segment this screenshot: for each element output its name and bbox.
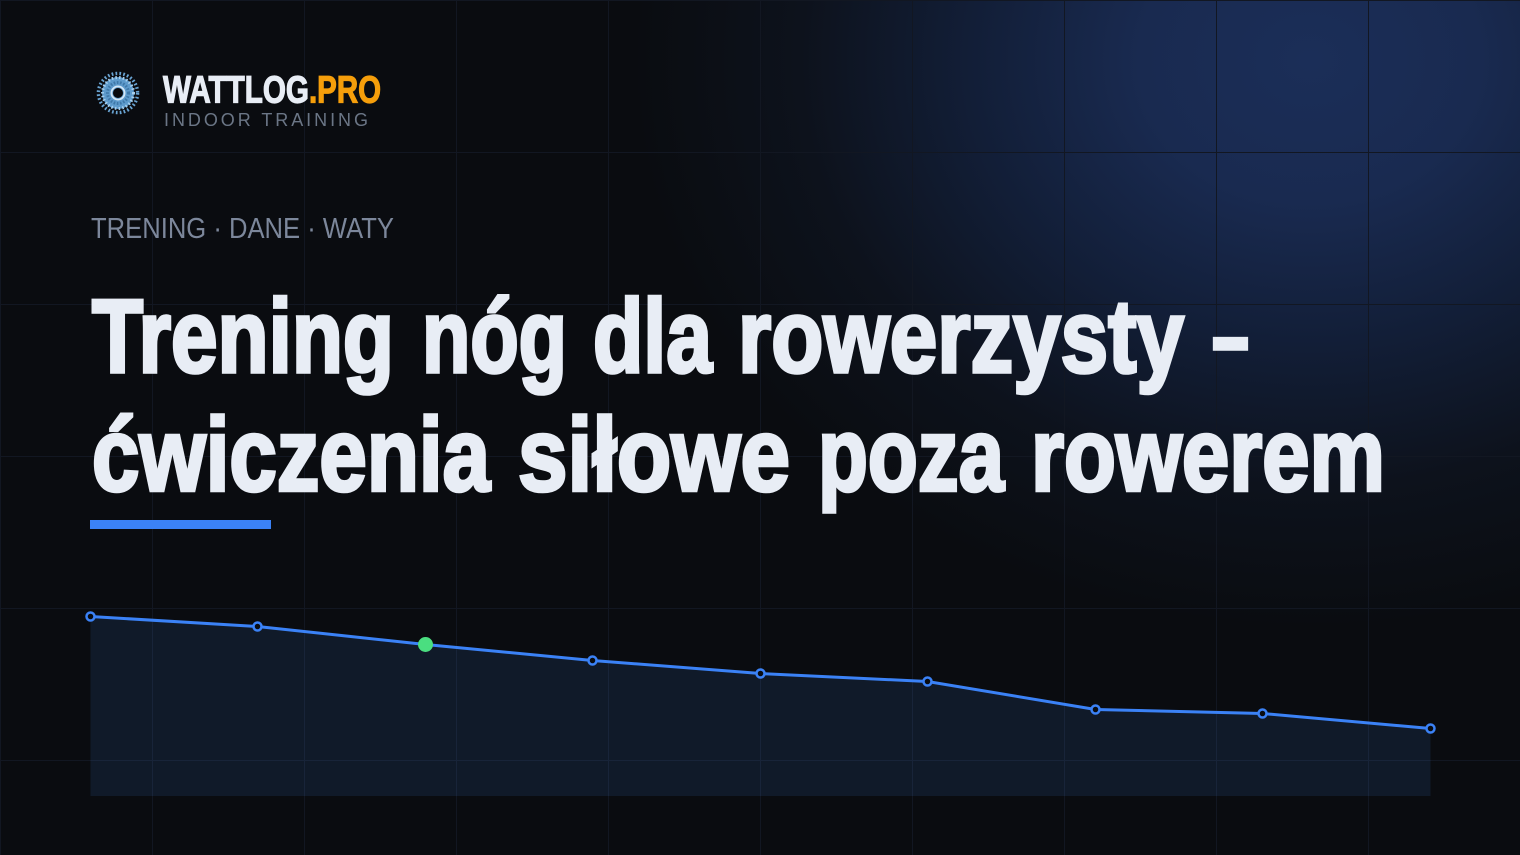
title: rowerzysty — [738, 279, 1184, 395]
line chart — [86, 612, 1434, 796]
title — [92, 279, 1385, 514]
logo subtitle: INDOOR TRAINING — [164, 110, 368, 130]
title: siłowe — [518, 398, 790, 514]
logo wordmark: .PRO — [309, 70, 381, 112]
title: – — [1212, 279, 1249, 395]
title: nóg — [422, 279, 567, 395]
title: rowerem — [1031, 398, 1385, 514]
eyebrow tagline: TRENING · DANE · WATY — [91, 213, 394, 245]
title accent bar — [90, 520, 271, 529]
logo wordmark: WATTLOG — [163, 70, 309, 112]
chart data points — [86, 612, 1434, 732]
title: dla — [593, 279, 713, 395]
icon: cassette gear logo — [98, 73, 138, 113]
chart area fill — [90, 616, 1430, 796]
title: Trening — [92, 279, 394, 395]
title: poza — [818, 398, 1005, 514]
highlighted data point — [418, 637, 433, 652]
chart line — [90, 616, 1430, 728]
title: ćwiczenia — [92, 398, 491, 514]
